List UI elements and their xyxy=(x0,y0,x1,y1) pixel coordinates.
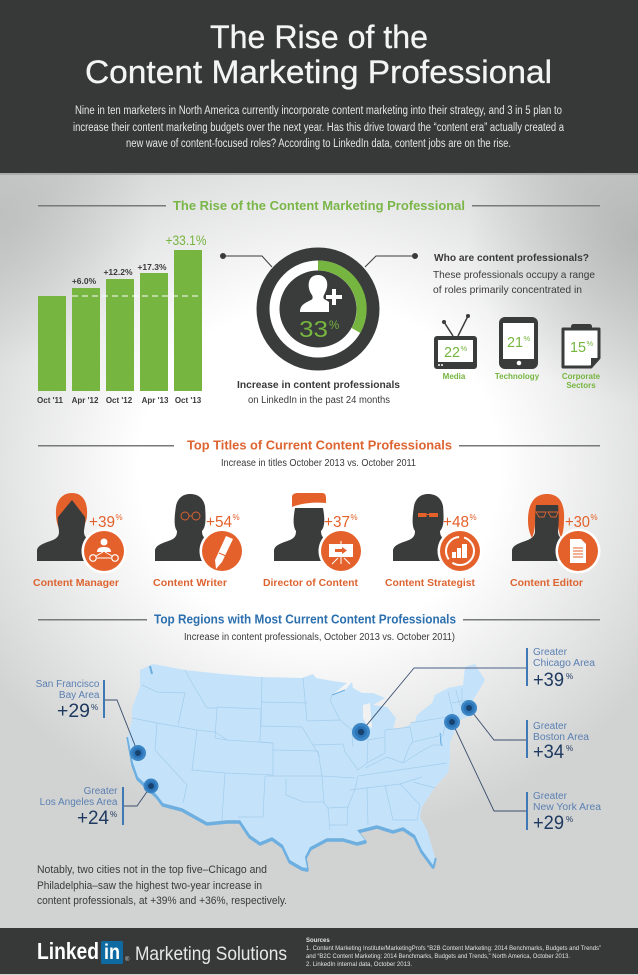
persona: director of content: Director of Content xyxy=(263,577,358,589)
icon: corporate clipboard 15 percent: % xyxy=(586,339,594,348)
logo: LinkedIn Marketing Solutions: in xyxy=(104,941,120,964)
callout: Chicago: % xyxy=(566,672,573,681)
bar chart xyxy=(37,233,206,405)
persona: content writer: +54 xyxy=(206,514,232,531)
bar chart: Apr '12 xyxy=(72,396,99,405)
title: The Rise of the xyxy=(210,19,428,55)
callout: Boston xyxy=(526,720,589,763)
connector lines xyxy=(220,254,418,267)
logo: LinkedIn Marketing Solutions: Linked xyxy=(37,938,99,964)
icon: corporate clipboard 15 percent: Corporate xyxy=(562,372,601,381)
bar chart: +17.3% xyxy=(137,262,167,272)
US map xyxy=(128,664,485,870)
bar chart: +12.2% xyxy=(103,267,133,277)
callout: Boston: Boston Area xyxy=(533,732,589,743)
donut caption: on LinkedIn in the past 24 months xyxy=(248,395,390,406)
section heading: rise: The Rise of the Content Marketing Professional xyxy=(173,198,465,213)
persona: content editor: % xyxy=(590,513,598,522)
callout: New York: Greater xyxy=(533,791,568,802)
callout: Chicago: +39 xyxy=(533,670,564,691)
callout: Chicago xyxy=(526,647,595,691)
persona: content strategist xyxy=(385,494,482,589)
callout: New York xyxy=(526,791,601,834)
persona: content manager: % xyxy=(116,513,123,522)
callout: San Francisco: +29 xyxy=(57,701,90,722)
icon: media tv 22 percent: Media xyxy=(443,372,466,381)
section heading: top titles xyxy=(38,438,600,469)
icon: chart in target xyxy=(446,537,474,565)
who are content professionals text: Who are content professionals? xyxy=(434,252,589,264)
bar chart: Oct '13 xyxy=(175,396,202,405)
persona: content strategist: +48 xyxy=(443,514,469,531)
title xyxy=(85,19,552,90)
logo: LinkedIn Marketing Solutions: Marketing Solutions xyxy=(135,943,287,965)
callout: Los Angeles: +24 xyxy=(77,808,109,829)
icon: media tv 22 percent xyxy=(434,314,477,381)
persona: content manager: Content Manager xyxy=(33,577,119,589)
donut caption xyxy=(237,379,400,406)
intro text: new wave of content-focused roles? According to LinkedIn data, content jobs are on the rise. xyxy=(126,138,511,150)
donut: 33 percent xyxy=(256,248,380,370)
sources: Sources xyxy=(306,938,330,944)
bar chart: Oct '12 xyxy=(106,396,133,405)
sources xyxy=(306,938,601,968)
note text: content professionals, at +39% and +36%, respectively. xyxy=(37,895,287,907)
icon: technology tablet 21 percent: % xyxy=(524,334,530,343)
callout: New York: % xyxy=(566,815,573,824)
note text: Notably, two cities not in the top five–Chicago and xyxy=(37,864,267,876)
callout: New York: +29 xyxy=(533,813,564,834)
callout: Boston: % xyxy=(566,744,573,753)
persona: director of content: % xyxy=(350,513,358,522)
icon: technology tablet 21 percent xyxy=(495,317,540,381)
section heading: top regions: Increase in content professionals, October 2013 vs. October 2011) xyxy=(184,632,455,643)
persona: director of content xyxy=(263,493,364,589)
donut value: % xyxy=(329,320,339,332)
callout: San Francisco: % xyxy=(91,703,98,712)
callout: Boston: Greater xyxy=(533,721,568,732)
icon: corporate clipboard 15 percent: Sectors xyxy=(566,381,596,390)
who are content professionals text xyxy=(433,252,595,296)
bar chart: Oct '11 xyxy=(37,396,64,405)
icon: org network xyxy=(90,538,118,561)
who are content professionals text: These professionals occupy a range xyxy=(433,269,595,281)
title: Content Marketing Professional xyxy=(85,54,552,90)
icon: technology tablet 21 percent: 21 xyxy=(507,334,523,351)
logo: LinkedIn Marketing Solutions xyxy=(37,938,287,965)
persona: director of content: +37 xyxy=(324,514,350,531)
persona: content writer: % xyxy=(232,513,240,522)
icon: technology tablet 21 percent: Technology xyxy=(495,372,540,381)
callout: San Francisco: San Francisco xyxy=(36,679,100,690)
icon: document xyxy=(570,539,586,563)
bar chart: Apr '13 xyxy=(142,396,169,405)
icon: media tv 22 percent: % xyxy=(460,344,468,353)
callout: Chicago: Greater xyxy=(533,647,568,658)
who are content professionals text: of roles primarily concentrated in xyxy=(433,284,582,296)
donut caption: Increase in content professionals xyxy=(237,379,400,391)
callout: Chicago: Chicago Area xyxy=(533,658,595,669)
persona: content editor: Content Editor xyxy=(510,577,583,589)
persona: content writer xyxy=(153,494,244,589)
persona: content manager: +39 xyxy=(89,514,115,531)
sources: 2. LinkedIn internal data, October 2013. xyxy=(306,962,412,968)
donut value: 33 xyxy=(299,316,328,342)
bar chart: +6.0% xyxy=(72,276,97,286)
donut value xyxy=(299,316,339,342)
logo: LinkedIn Marketing Solutions: ® xyxy=(125,956,130,963)
map leader lines xyxy=(105,668,527,811)
callout: Los Angeles: % xyxy=(110,810,117,819)
callout: New York: New York Area xyxy=(533,802,601,813)
callout: Los Angeles xyxy=(40,786,124,829)
callout: Los Angeles: Greater xyxy=(84,786,118,797)
sources: 1. Content Marketing Institute/MarketingProfs “B2B Content Marketing: 2014 Benchmarks, Budgets and Trends” xyxy=(306,946,601,952)
persona: content strategist: % xyxy=(470,513,477,522)
persona: content editor: +30 xyxy=(565,514,590,531)
note text xyxy=(37,864,287,907)
persona: content writer: Content Writer xyxy=(153,577,227,589)
map markers xyxy=(130,700,477,794)
section heading: top titles: Top Titles of Current Content Professionals xyxy=(187,438,452,452)
section heading: top regions xyxy=(38,612,600,643)
bar chart: +33.1% xyxy=(166,233,206,248)
callout: San Francisco xyxy=(36,679,105,722)
persona: content manager xyxy=(33,493,126,589)
footer xyxy=(0,928,638,974)
callout: San Francisco: Bay Area xyxy=(59,690,100,701)
callout: Boston: +34 xyxy=(533,742,564,763)
intro text xyxy=(73,105,564,150)
section heading: top regions: Top Regions with Most Current Content Professionals xyxy=(154,612,456,626)
icon: person plus xyxy=(300,275,342,312)
section heading: top titles: Increase in titles October 2013 vs. October 2011 xyxy=(221,458,416,469)
persona: content strategist: Content Strategist xyxy=(385,577,475,589)
icon: pen xyxy=(215,536,233,569)
icon: presentation board xyxy=(329,541,353,564)
icon: corporate clipboard 15 percent xyxy=(562,324,601,390)
persona: content editor xyxy=(510,494,600,589)
note text: Philadelphia–saw the highest two-year increase in xyxy=(37,880,262,892)
icon: media tv 22 percent: 22 xyxy=(444,344,460,361)
header banner xyxy=(0,0,638,175)
icon: corporate clipboard 15 percent: 15 xyxy=(570,339,586,356)
sources: and “B2C Content Marketing: 2014 Benchmarks, Budgets and Trends,” North America, October 2013. xyxy=(306,954,570,960)
callout: Los Angeles: Los Angeles Area xyxy=(40,797,118,808)
